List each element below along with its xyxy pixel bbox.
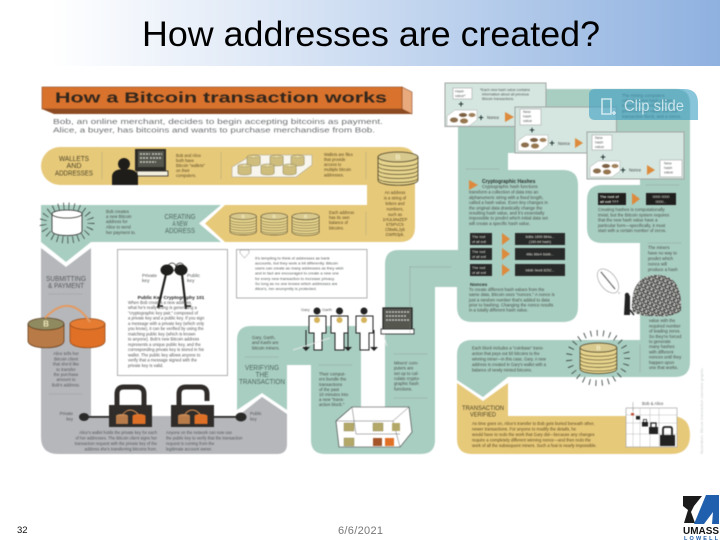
text: nonces explanation: To create different hash values from the <box>469 287 545 292</box>
panel: required leading zeros: 0000 0000 <box>652 195 670 199</box>
label: public key: Public <box>250 411 263 416</box>
panel: cryptographic hashes: Cryptographic hash functions <box>482 184 538 189</box>
heading: creating a new address: CREATING <box>164 214 196 221</box>
panel: cryptographic hashes: alphanumeric string with a fixed length, <box>469 195 543 200</box>
text: nonces explanation: just a random number that's added to data <box>468 298 550 302</box>
text: coinbase transaction: balance of newly minted bitcoins. <box>472 368 532 372</box>
text: hash chain explanation: based on a combination of the <box>622 103 680 108</box>
icon: glowing new address cylinder <box>43 206 91 240</box>
text: transaction verified explanation: newer transactions. For anyone to modify the details, he <box>472 426 577 432</box>
side credit: Illustration: Bitcoin transaction overview graphic <box>699 368 704 454</box>
text: wallet files: access to <box>324 162 342 167</box>
text: transaction verified explanation: would have to redo the work that Gary did—because any changes <box>472 432 594 437</box>
text: alice tells her client: to transfer <box>56 367 76 372</box>
hash block two: + <box>529 125 535 135</box>
label: private key: Private <box>60 411 74 416</box>
hash example rows: (160-bit hash) <box>529 240 551 244</box>
text: cryptography explanation: corresponding private key is stored in his <box>128 347 204 352</box>
hash example rows: The root <box>472 250 485 254</box>
icon: person at computer <box>112 149 168 185</box>
heading: verifying the transaction: TRANSACTION <box>239 379 285 386</box>
icon: glowing minted coin stack <box>569 333 627 383</box>
text: coinbase transaction: address is created in Gary's wallet with a <box>472 362 547 367</box>
text: cryptography explanation: a message with a private key (which only <box>128 321 205 326</box>
text: each address balance: bitcoins. <box>329 226 344 230</box>
text: each address balance: has its own <box>329 215 350 220</box>
text: wallets: both have <box>176 158 195 163</box>
callout: addresses vs accounts: So long as no one knows which addresses are <box>255 281 338 286</box>
hash block two: + <box>549 138 555 148</box>
text: miners cannot predict: predict which <box>648 256 674 261</box>
text: address definition: Cl8wkLJyb <box>385 227 406 232</box>
panel: transaction verified <box>457 383 690 454</box>
panel: cryptographic hashes: resulting hash value, and it's essentially <box>469 210 545 216</box>
panel: cryptographic hashes: Cryptographic Hashes <box>482 179 536 185</box>
hash block three: value <box>664 170 673 174</box>
text: transaction block: of the past <box>319 387 340 392</box>
slide date: 6/6/2021 <box>338 525 383 537</box>
text: wallets: Bob and Alice <box>176 153 202 158</box>
text: address definition: GWRt3pk. <box>386 232 404 237</box>
overlay: clip slide button <box>589 89 698 120</box>
text: cryptography explanation: you know), it can be verified by using the <box>128 326 204 331</box>
hash example rows: b8db 9ee8 8252... <box>526 268 554 272</box>
text: address definition: letters and <box>385 201 405 206</box>
text: cryptography explanation: to anyone). Bob's new Bitcoin address <box>128 337 199 342</box>
heading: nonces: Nonces <box>470 282 488 288</box>
text: coinbase transaction: action that pays out 50 bitcoins to the <box>472 351 540 356</box>
panel: creating a new address <box>41 205 221 262</box>
text: address definition: 1HULMwZEP <box>383 217 408 222</box>
panel: required leading zeros: The root of <box>600 195 620 199</box>
text: cryptography explanation: what he's really doing is generating a <box>128 305 197 310</box>
text: wallets: Bitcoin "wallets" <box>176 163 205 168</box>
callout: addresses vs accounts: Alice's, her anonymity is protected. <box>255 286 317 291</box>
heading: wallets and addresses <box>55 156 93 178</box>
hash block three: New <box>664 162 672 166</box>
text: alice tells her client: Bob's address. <box>52 382 80 388</box>
text: private key signing: address she's transferring bitcoins from. <box>85 446 157 452</box>
text: address definition: An address <box>385 190 405 195</box>
heading: wallets and addresses: ADDRESSES <box>55 170 93 178</box>
hash block one: *Each new hash value contains <box>480 88 530 92</box>
callout: addresses vs accounts: and in fact are encouraged to create a new one <box>255 270 340 276</box>
text: generate many hashes: value with the <box>649 318 676 323</box>
text: public key verification: request is coming from the <box>166 441 215 446</box>
hash block one: Nonce <box>487 115 500 120</box>
icon: clip <box>602 99 616 115</box>
hash block three: hash <box>595 140 603 144</box>
panel: required leading zeros: start with a certain number of zeros. <box>598 228 666 233</box>
text: each address balance: Each address <box>329 210 354 215</box>
text: private key signing: Alice's wallet holds the private key for each <box>79 430 158 435</box>
label: private key: key <box>66 416 74 422</box>
hash block three: Nonce <box>629 168 642 172</box>
text: address definition: such as <box>388 212 402 217</box>
hash block one: value* <box>455 94 466 98</box>
text: miners: and Kashi are <box>252 340 279 345</box>
text: hash chain explanation: transaction block, and a nonce. <box>622 114 681 119</box>
panel: teal verification and hashing pathway <box>237 83 690 454</box>
text: generate many hashes: happen upon <box>649 360 675 365</box>
text: hash chain explanation: previous hash value, the new <box>622 108 679 114</box>
text: miners computers: functions. <box>394 386 412 392</box>
illustration: ledger staircase of locks: Bob & Alice <box>642 401 664 406</box>
icon: large coin stack <box>378 152 418 185</box>
hash example rows <box>470 233 565 276</box>
panel: cryptographic hashes: will create a specific hash value. <box>469 221 530 226</box>
text: generate many hashes: many hashes <box>649 344 675 349</box>
text: miners computers: Miners' com- <box>394 360 419 366</box>
hash block three: value <box>595 145 604 149</box>
text: private key signing: transaction request with the private key of the <box>75 441 158 446</box>
text: alice tells her client: the purchase <box>54 372 79 377</box>
text: coinbase transaction: winning miner—in this case, Gary. A new <box>472 356 546 362</box>
header gradient band <box>0 0 720 66</box>
text: miners cannot predict: The miners <box>648 245 670 250</box>
icon: open padlock <box>171 387 214 427</box>
illustration: miner and rubble mound <box>593 265 681 316</box>
illustration: three miners and laptop: Gary <box>301 307 310 312</box>
text: public key verification: legitimate account owner. <box>166 446 212 452</box>
hash block one <box>445 83 546 126</box>
heading: creating a new address: A NEW <box>172 221 188 228</box>
text: miners cannot predict: have no way to <box>648 250 678 256</box>
hash block three: + <box>620 165 626 175</box>
text: address definition: numbers, <box>386 206 404 212</box>
text: nonces explanation: same data, Bitcoin uses "nonces." A nonce is <box>469 292 555 297</box>
icon: public key <box>214 412 246 422</box>
text: cryptography explanation: When Bob creates a new address, <box>128 300 192 305</box>
text: generate many hashes: of leading zeros. <box>649 328 681 334</box>
hash block one: + <box>478 112 484 122</box>
text: alice tells her client: that she'd like <box>53 362 80 366</box>
callout: addresses vs accounts: accounts, but they work a bit differently. Bitcoin <box>255 260 338 266</box>
hash block three: hash <box>664 166 672 170</box>
heading: verifying the transaction: THE <box>256 372 269 379</box>
slide number: 32 <box>17 525 28 536</box>
icon: private key <box>79 413 110 421</box>
icon: coin transfer cylinders <box>28 306 105 348</box>
text: miners computers: culate crypto- <box>394 376 420 381</box>
text: generate many hashes: to generate <box>649 339 671 344</box>
text: generate many hashes: So they're forced <box>649 334 682 339</box>
heading: transaction verified: TRANSACTION <box>462 405 504 412</box>
illustration: three miners and laptop: Garth <box>322 307 332 312</box>
overlay: clip slide button: Clip slide <box>624 98 684 115</box>
text: hash chain explanation: calculate new hash values <box>622 98 672 103</box>
heading: public key cryptography: Public Key Cryptography 101 <box>138 295 205 301</box>
text: miners computers: graphic hash <box>394 381 419 386</box>
text: generate many hashes: nonces until they <box>649 354 682 360</box>
text: coinbase transaction: Each block includes a "coinbase" trans- <box>472 346 544 350</box>
label: public key: key <box>250 416 258 422</box>
text: alice tells her client: Bitcoin client <box>54 356 79 362</box>
hash block three <box>587 132 684 179</box>
labels: private and public key: Public <box>187 273 201 279</box>
text: wallet files: that provide <box>324 157 346 162</box>
panel: required leading zeros: particular form—specifically, it must <box>598 223 666 228</box>
heading: transaction verified: VERIFIED <box>470 412 496 418</box>
text: cryptography explanation: "cryptographic key pair," composed of <box>128 310 199 316</box>
orange title banner: How a Bitcoin transaction works <box>55 90 387 106</box>
intro text: Alice, a buyer, has bitcoins and wants to purchase merchandise from Bob. <box>53 126 375 134</box>
text: address definition: kTbPVCh <box>386 222 404 227</box>
callout: addresses vs accounts: users can create as many addresses as they wish <box>255 266 344 270</box>
text: transaction block: a new "trans- <box>319 397 345 402</box>
text: address definition: is a string of <box>384 196 407 200</box>
text: transaction block: 10 minutes into <box>319 392 349 397</box>
text: bob creates address: a new Bitcoin <box>106 214 132 219</box>
text: nonces explanation: in a totally different hash value. <box>469 308 528 312</box>
hash example rows: of all evil <box>472 271 486 275</box>
hash block three: + <box>600 152 606 162</box>
text: each address balance: balance of <box>329 220 349 225</box>
hash example rows: of all evil <box>472 240 486 244</box>
text: miners: Gary, Garth, <box>252 335 275 340</box>
panel: required leading zeros: all evil ??? <box>600 200 619 204</box>
hash block one: + <box>458 99 464 109</box>
heading: creating a new address <box>164 214 196 235</box>
text: hash chain explanation: The mining computers <box>622 93 665 98</box>
heading: submitting and payment: & PAYMENT <box>48 283 85 290</box>
text: public key verification: the public key to verify that the transaction <box>166 436 243 440</box>
hash example rows: 4f8c 86e4 6ddb... <box>526 252 554 256</box>
illustration: ledger staircase of locks <box>626 401 677 447</box>
panel: required leading zeros: trivial, but the Bitcoin system requires <box>598 212 669 218</box>
text: bob creates address: Bob creates <box>106 209 129 214</box>
callout: addresses vs accounts: It's tempting to think of addresses as bank <box>255 256 330 260</box>
text: public key verification: Anyone on the network can now use <box>166 430 233 435</box>
text: wallet files: addresses. <box>324 172 344 178</box>
hash block one: information about all previous <box>482 92 529 96</box>
hash block two: New <box>523 110 531 114</box>
hash block one: Bitcoin transactions. <box>482 97 514 101</box>
text: miners computers: set up to cal- <box>394 371 419 376</box>
text: transaction verified explanation: As time goes on, Alice's transfer to Bob gets buried beneath other, <box>472 421 595 426</box>
text: alice tells her client: amount to <box>56 377 76 382</box>
icon: wallet box of coin stacks <box>232 155 312 177</box>
labels: private and public key: Private <box>142 273 157 279</box>
text: wallets: computers. <box>176 173 196 178</box>
heading: creating a new address: ADDRESS <box>165 228 195 235</box>
panel: cryptographic hashes: transform a collection of data into an <box>469 190 539 194</box>
text: transaction block: Their comput- <box>319 372 346 376</box>
text: bob creates address: her payment to. <box>106 230 136 235</box>
panel: submitting and payment <box>28 248 287 454</box>
text: generate many hashes: one that works. <box>649 365 678 370</box>
panel: cryptographic hashes: impossible to predict which initial data set <box>469 216 549 220</box>
box row: hash value chain <box>445 83 684 179</box>
logo: UMass Lowell: UMASS <box>683 525 719 537</box>
labels: private and public key: key <box>187 278 195 284</box>
heading: wallets and addresses: AND <box>66 163 82 170</box>
orange title banner <box>42 87 412 114</box>
hash example rows: The root <box>472 266 485 270</box>
text: wallets: on their <box>176 168 190 173</box>
hash block two: value <box>523 119 532 123</box>
text: generate many hashes: required number <box>649 324 681 328</box>
heading: submitting and payment <box>46 276 86 290</box>
text: transaction block: action block." <box>319 402 345 407</box>
hash block two: Nonce <box>558 141 571 146</box>
text: dotted flow arrow <box>410 267 452 335</box>
panel: cryptographic hashes <box>468 179 565 312</box>
heading: wallets and addresses: WALLETS <box>59 156 89 163</box>
icon: closed padlock <box>109 387 152 427</box>
text: private key signing: of her addresses. The Bitcoin client signs her <box>75 436 158 440</box>
illustration: transaction block box <box>336 407 412 447</box>
hash block two: hash <box>523 114 531 118</box>
icon: pair of keys <box>158 263 191 309</box>
hash example rows: The root <box>472 235 485 239</box>
intro text <box>53 117 383 134</box>
text: bob creates address: address for <box>106 219 128 224</box>
text: cryptography explanation: represents a unique public key, and the <box>128 342 201 347</box>
text: cryptography explanation: verify that a message signed with the <box>128 358 198 363</box>
callout: addresses vs accounts: for every new transaction to increase privacy. <box>255 276 335 281</box>
intro text: Bob, an online merchant, decides to begin accepting bitcoins as payment. <box>53 117 383 126</box>
hash example rows: 6d8a 1899 864a... <box>526 235 554 239</box>
text: miners cannot predict: nonce will <box>648 262 667 266</box>
text: generate many hashes: with different <box>649 350 674 354</box>
panel: required leading zeros: Creating hashes is computationally <box>598 207 665 212</box>
text: bob creates address: Alice to send <box>106 224 131 230</box>
icon: coin transfer cylinders: B <box>43 320 49 328</box>
logo: UMass Lowell <box>683 495 719 540</box>
icon: three address coin stacks <box>230 213 319 236</box>
text: nonces explanation: prior to hashing. Changing the nonce results <box>469 302 553 308</box>
text: cryptography explanation: wallet. The public key allows anyone to <box>128 352 201 358</box>
panel: required leading zeros: 0000... <box>656 200 666 204</box>
hash block one: Hash <box>455 90 464 94</box>
panel: cryptographic hashes: the original data drastically change the <box>469 206 543 210</box>
text: wallet files: Wallets are files <box>324 152 353 157</box>
callout: addresses vs accounts <box>236 250 367 298</box>
text: transaction verified explanation: require a completely different winning nonce—and then redo the <box>472 438 592 442</box>
illustration: three miners and laptop <box>293 307 414 351</box>
text: cryptography explanation: a private key and a public key. If you sign <box>128 316 205 321</box>
labels: private and public key: key <box>142 278 150 284</box>
hash block two <box>515 107 616 153</box>
text: alice tells her client: Alice tells her <box>53 351 79 356</box>
title: How addresses are created? <box>142 15 600 54</box>
text: miners: bitcoin miners. <box>252 346 280 350</box>
heading: transaction verified <box>462 405 504 418</box>
hash block three: New <box>595 136 603 140</box>
heading: verifying the transaction: VERIFYING <box>245 365 279 372</box>
text: cryptography explanation: matching public key (which is known <box>128 332 196 336</box>
heading: submitting and payment: SUBMITTING <box>46 276 86 283</box>
panel: cryptographic hashes: called a hash value. Even tiny changes in <box>469 200 548 205</box>
text: wallet files: multiple bitcoin <box>324 167 352 172</box>
text: transaction block: ers bundle the <box>319 376 347 382</box>
panel: required leading zeros: that the new hash value have a <box>598 218 658 222</box>
panel: public key cryptography <box>118 250 228 376</box>
text: cryptography explanation: private key is valid. <box>128 363 163 368</box>
text: transaction block: transactions <box>319 382 342 387</box>
heading: verifying the transaction <box>239 365 285 386</box>
text: miners cannot predict: produce a hash <box>648 267 678 272</box>
panel: required leading zeros <box>598 193 676 233</box>
hash example rows: of all evil <box>472 255 486 259</box>
panel: wallets and addresses <box>41 147 418 242</box>
text: miners computers: puters are <box>394 366 414 370</box>
text: transaction verified explanation: work of all the subsequent miners. Such a feat is nearly impossible. <box>472 443 597 448</box>
